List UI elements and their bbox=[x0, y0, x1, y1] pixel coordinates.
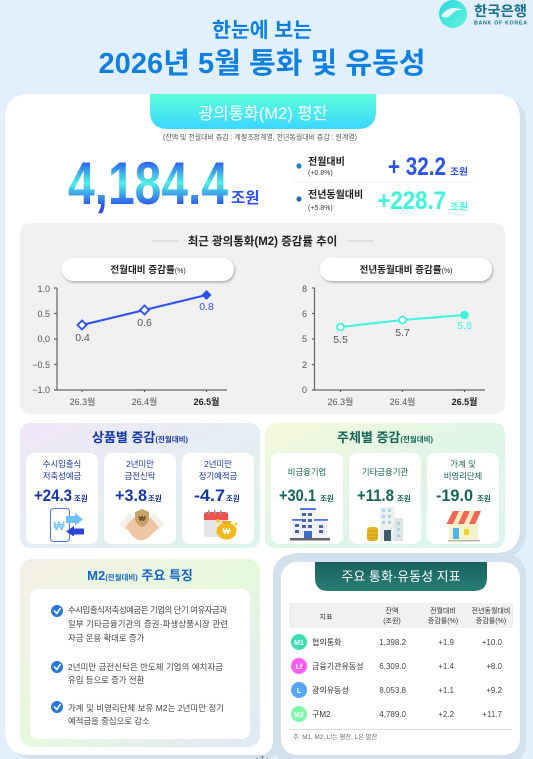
logo: Bank of Korea bbox=[439, 0, 527, 28]
logo: Bank of Korea: BANK OF KOREA bbox=[474, 20, 527, 26]
panel: M2 key features bbox=[20, 559, 260, 747]
table header: 증감률(%) bbox=[428, 617, 458, 625]
line chart: MoM bbox=[32, 284, 227, 407]
row: M1: +1.9 bbox=[438, 638, 455, 647]
line chart: YoY: 26.4월 bbox=[390, 396, 415, 407]
panel: change by holder bbox=[265, 423, 505, 548]
table header: 전년동월대비 bbox=[472, 606, 510, 615]
pill: YoY bbox=[320, 258, 492, 281]
year-on-year change bbox=[296, 187, 468, 215]
line chart: YoY: 5 bbox=[302, 334, 307, 344]
panel: key indicators backdrop bbox=[273, 554, 526, 759]
row: L: 광의유동성 bbox=[312, 685, 349, 695]
month-on-month change: + 32.2 bbox=[388, 153, 446, 181]
heading: features: M2(전월대비) 주요 특징 bbox=[87, 568, 193, 583]
card: money trust: 2년미만 bbox=[126, 459, 154, 469]
card: households: 가계 및 bbox=[450, 459, 476, 469]
line chart: YoY: 5.7 bbox=[395, 327, 410, 339]
card: demand deposits: 수시입출식 bbox=[43, 459, 81, 469]
footnote: 주: M1, M2, Lf는 평잔, L은 말잔 bbox=[293, 732, 378, 741]
row: old M2: +11.7 bbox=[482, 710, 503, 719]
divider bbox=[293, 182, 473, 183]
table header: 전월대비 bbox=[430, 606, 456, 615]
row: L: +9.2 bbox=[486, 686, 503, 695]
card: demand deposits: ₩ bbox=[53, 519, 65, 533]
line chart: YoY: 6 bbox=[302, 309, 307, 319]
card: other financial institutions: 조원 bbox=[397, 493, 411, 503]
row: L: 8,053.8 bbox=[379, 686, 407, 695]
bullet 2 bbox=[51, 661, 223, 685]
table header: (조원) bbox=[383, 616, 401, 625]
tab: indicators heading: 주요 통화·유동성 지표 bbox=[341, 569, 461, 584]
panel: M2 trend charts bbox=[20, 223, 505, 414]
row: M1: +10.0 bbox=[482, 638, 503, 647]
header tab: M2: 광의통화(M2) 평잔 bbox=[198, 104, 328, 123]
card: money trust: 금전신탁 bbox=[125, 471, 156, 481]
line chart: YoY: 5.8 bbox=[457, 320, 472, 332]
tab: indicators heading bbox=[315, 562, 487, 591]
line chart: MoM: 0.6 bbox=[137, 317, 152, 329]
row: Lf: 6,309.0 bbox=[379, 662, 407, 671]
bullet 2: 2년미만 금전신탁은 반도체 기업의 예치자금 bbox=[68, 662, 223, 672]
row: M1: M1 bbox=[294, 640, 304, 647]
row: L: +1.1 bbox=[438, 686, 455, 695]
title bbox=[98, 19, 426, 80]
line chart: YoY: 26.3월 bbox=[328, 396, 353, 407]
card: households: 조원 bbox=[477, 493, 491, 503]
heading: product: 상품별 증감(전월대비) bbox=[92, 430, 189, 445]
line chart: MoM: −1.0 bbox=[32, 385, 50, 395]
card: money trust bbox=[104, 453, 176, 544]
row: Lf: +1.4 bbox=[438, 662, 455, 671]
card: money trust: +3.8 bbox=[115, 487, 147, 505]
panel: change by product bbox=[20, 423, 260, 548]
bullet 2: 유입 등으로 증가 전환 bbox=[68, 675, 145, 685]
card: time deposits: -4.7 bbox=[194, 487, 225, 505]
header tab: M2 bbox=[150, 94, 376, 129]
chart section heading: 최근 광의통화(M2) 증감률 추이 bbox=[188, 234, 337, 248]
row: Lf bbox=[291, 658, 503, 674]
title: 2026년 5월 통화 및 유동성 bbox=[98, 47, 426, 80]
line chart: YoY: 0 bbox=[302, 385, 307, 395]
line chart: MoM: 0.4 bbox=[75, 332, 90, 344]
line chart: MoM: 26.5월 bbox=[194, 396, 219, 407]
bullet 1 bbox=[51, 605, 228, 643]
card: corporates bbox=[271, 453, 343, 544]
bullet 1: 일부 기타금융기관의 증권·파생상품시장 관련 bbox=[68, 619, 228, 629]
card: other financial institutions bbox=[349, 453, 421, 544]
note: (잔액 및 전월대비 증감 : 계절조정계열, 전년동월대비 증감 : 원계열) bbox=[163, 132, 357, 142]
card: demand deposits: 조원 bbox=[74, 493, 88, 503]
logo: Bank of Korea: 한국은행 bbox=[474, 3, 527, 19]
row: old M2: M2 bbox=[294, 712, 304, 719]
bullet 3: 예적금을 중심으로 감소 bbox=[68, 716, 150, 726]
line chart: YoY: 26.5월 bbox=[452, 396, 477, 407]
card: corporates: +30.1 bbox=[279, 487, 316, 505]
line chart: MoM: 0.0 bbox=[37, 334, 50, 344]
card: time deposits bbox=[182, 453, 254, 544]
year-on-year change: 전년동월대비 bbox=[308, 188, 363, 201]
pill: YoY: 전년동월대비 증감률(%) bbox=[360, 264, 452, 276]
table header: 지표 bbox=[320, 612, 333, 621]
row: Lf: +8.0 bbox=[486, 662, 503, 671]
row: M1: 1,398.2 bbox=[379, 638, 407, 647]
bullet 1: 자금 운용 확대로 증가 bbox=[68, 633, 145, 643]
pill: MoM bbox=[62, 258, 234, 281]
headline number: 4,184.4 bbox=[68, 150, 229, 217]
bullet 3: 가계 및 비영리단체 보유 M2는 2년미만 정기 bbox=[68, 703, 224, 713]
line chart: YoY: 5.5 bbox=[333, 334, 348, 346]
row: L bbox=[291, 682, 503, 698]
card: other financial institutions: +11.8 bbox=[357, 487, 394, 505]
card: time deposits: 2년미만 bbox=[204, 459, 232, 469]
card: money trust: ₩ bbox=[139, 516, 146, 523]
card: time deposits: 정기예적금 bbox=[199, 471, 238, 481]
card: households: 비영리단체 bbox=[444, 471, 482, 481]
row: M1: 협의통화 bbox=[312, 637, 342, 647]
line chart: MoM: 26.3월 bbox=[70, 396, 95, 407]
table header: 증감률(%) bbox=[476, 617, 506, 625]
row: old M2: 4,789.0 bbox=[379, 710, 407, 719]
line chart: MoM: 1.0 bbox=[37, 284, 50, 294]
card: demand deposits: 저축성예금 bbox=[43, 471, 82, 481]
line chart: MoM: −0.5 bbox=[32, 360, 50, 370]
row: L: L bbox=[297, 688, 302, 695]
card: demand deposits: +24.3 bbox=[34, 487, 72, 505]
title: 한눈에 보는 bbox=[212, 19, 312, 42]
card: time deposits: ₩ bbox=[223, 527, 231, 536]
line chart: YoY bbox=[302, 284, 485, 407]
year-on-year change: (+5.8%) bbox=[308, 205, 333, 212]
card: corporates: 조원 bbox=[320, 493, 334, 503]
row: old M2 bbox=[291, 706, 503, 722]
line chart: MoM: 0.8 bbox=[199, 301, 214, 313]
card: corporates: 비금융기업 bbox=[288, 467, 326, 477]
row: M1 bbox=[291, 634, 503, 650]
row: old M2: +2.2 bbox=[438, 710, 455, 719]
row: old M2: 구M2 bbox=[312, 710, 331, 719]
card: money trust: 조원 bbox=[148, 493, 162, 503]
month-on-month change: 전월대비 bbox=[308, 155, 345, 168]
line chart: YoY: 2 bbox=[302, 360, 307, 370]
card: households bbox=[427, 453, 499, 544]
row: Lf: 금융기관유동성 bbox=[312, 661, 364, 671]
pill: MoM: 전월대비 증감률(%) bbox=[110, 264, 186, 276]
year-on-year change: +228.7 bbox=[378, 187, 446, 215]
bullet 1: 수시입출식저축성예금은 기업의 단기 여유자금과 bbox=[68, 605, 227, 615]
heading: holder: 주체별 증감(전월대비) bbox=[337, 430, 434, 445]
year-on-year change: 조원 bbox=[450, 200, 468, 213]
card: demand deposits bbox=[26, 453, 98, 544]
headline number: 조원 bbox=[231, 189, 260, 207]
line chart: MoM: 0.5 bbox=[37, 309, 50, 319]
line chart: YoY: 8 bbox=[302, 284, 307, 294]
card: other financial institutions: 기타금융기관 bbox=[362, 467, 408, 477]
month-on-month change bbox=[296, 153, 468, 181]
card: households: -19.0 bbox=[436, 487, 473, 505]
card: time deposits: 조원 bbox=[226, 493, 240, 503]
table header: 잔액 bbox=[386, 606, 398, 615]
table header bbox=[289, 603, 513, 628]
bullet 3 bbox=[51, 701, 224, 726]
month-on-month change: (+0.8%) bbox=[308, 170, 333, 177]
month-on-month change: 조원 bbox=[450, 165, 468, 178]
row: Lf: Lf bbox=[296, 664, 303, 671]
panel: key indicators table bbox=[281, 562, 520, 755]
line chart: MoM: 26.4월 bbox=[132, 396, 157, 407]
